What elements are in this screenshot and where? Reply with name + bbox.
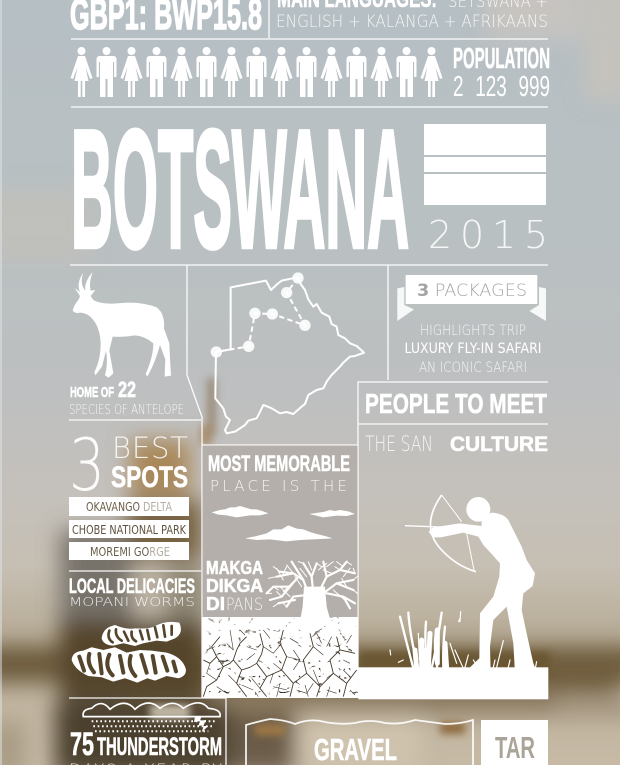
icon: clouds	[212, 506, 355, 541]
panel: most memorable place	[202, 446, 358, 698]
place name: DIKGA	[206, 576, 263, 596]
panel: local delicacies	[69, 575, 195, 683]
icon: storm cloud	[83, 703, 220, 732]
icon: mopani worms	[72, 622, 186, 683]
place name: MAKGA	[206, 558, 263, 578]
flag stripes	[424, 124, 546, 205]
spots heading: SPOTS	[111, 461, 188, 494]
cracked salt pan	[202, 617, 358, 698]
population figure: 2 123 999	[453, 71, 550, 103]
icon: antelope	[73, 272, 171, 378]
map of Botswana with route	[211, 272, 364, 433]
population icons	[70, 47, 442, 97]
thunderstorm figure	[69, 726, 222, 765]
people heading: PEOPLE TO MEET	[365, 388, 547, 419]
thunderstorm figure: 75	[70, 726, 94, 762]
delicacies heading: LOCAL DELICACIES	[69, 575, 195, 598]
package list: LUXURY FLY-IN SAFARI	[404, 341, 542, 357]
san culture heading	[365, 432, 548, 456]
place name	[206, 558, 263, 615]
antelope caption: SPECIES OF ANTELOPE	[69, 403, 184, 418]
spot: Okavango Delta: OKAVANGO DELTA	[86, 499, 172, 514]
panel: antelope	[69, 272, 184, 418]
best heading: BEST	[112, 431, 188, 465]
big number 3: 3	[69, 423, 105, 507]
place subheading: PLACE IS THE	[210, 477, 347, 495]
tar label: TAR	[495, 730, 535, 765]
san culture heading: CULTURE	[450, 433, 548, 456]
san culture heading: THE SAN	[365, 432, 433, 456]
grass tufts	[390, 612, 547, 673]
icon: San archer	[358, 495, 548, 699]
gravel outline	[246, 719, 473, 765]
panel: packages	[397, 275, 546, 376]
place name: PANS	[226, 595, 263, 615]
population figure	[453, 43, 550, 103]
spot: Moremi Gorge: MOREMI GORGE	[90, 544, 170, 559]
icon: baobab tree	[267, 562, 357, 625]
thunderstorm figure: THUNDERSTORM	[97, 733, 222, 761]
panel: thunderstorms	[69, 703, 222, 765]
memorable heading: MOST MEMORABLE	[208, 451, 350, 476]
panel: people to meet	[358, 388, 548, 699]
languages block: ENGLISH + KALANGA + AFRIKAANS	[276, 12, 548, 32]
year: 2015	[428, 213, 548, 257]
package list	[404, 323, 542, 376]
panel: tar road	[481, 720, 548, 765]
delicacies subheading: MOPANI WORMS	[69, 595, 195, 609]
antelope caption: 22	[118, 377, 136, 402]
package list: AN ICONIC SAFARI	[419, 360, 527, 376]
banner text: 3 PACKAGES	[417, 281, 527, 301]
panel: 3 best spots	[69, 423, 189, 560]
panel: gravel road	[246, 719, 473, 765]
antelope caption: HOME OF	[70, 384, 114, 401]
spot: Chobe National Park: CHOBE NATIONAL PARK	[72, 522, 187, 537]
languages block	[276, 0, 548, 32]
package list: HIGHLIGHTS TRIP	[420, 323, 526, 339]
place name: DI	[206, 594, 225, 614]
banner ribbon	[397, 275, 546, 321]
antelope caption	[69, 377, 184, 418]
